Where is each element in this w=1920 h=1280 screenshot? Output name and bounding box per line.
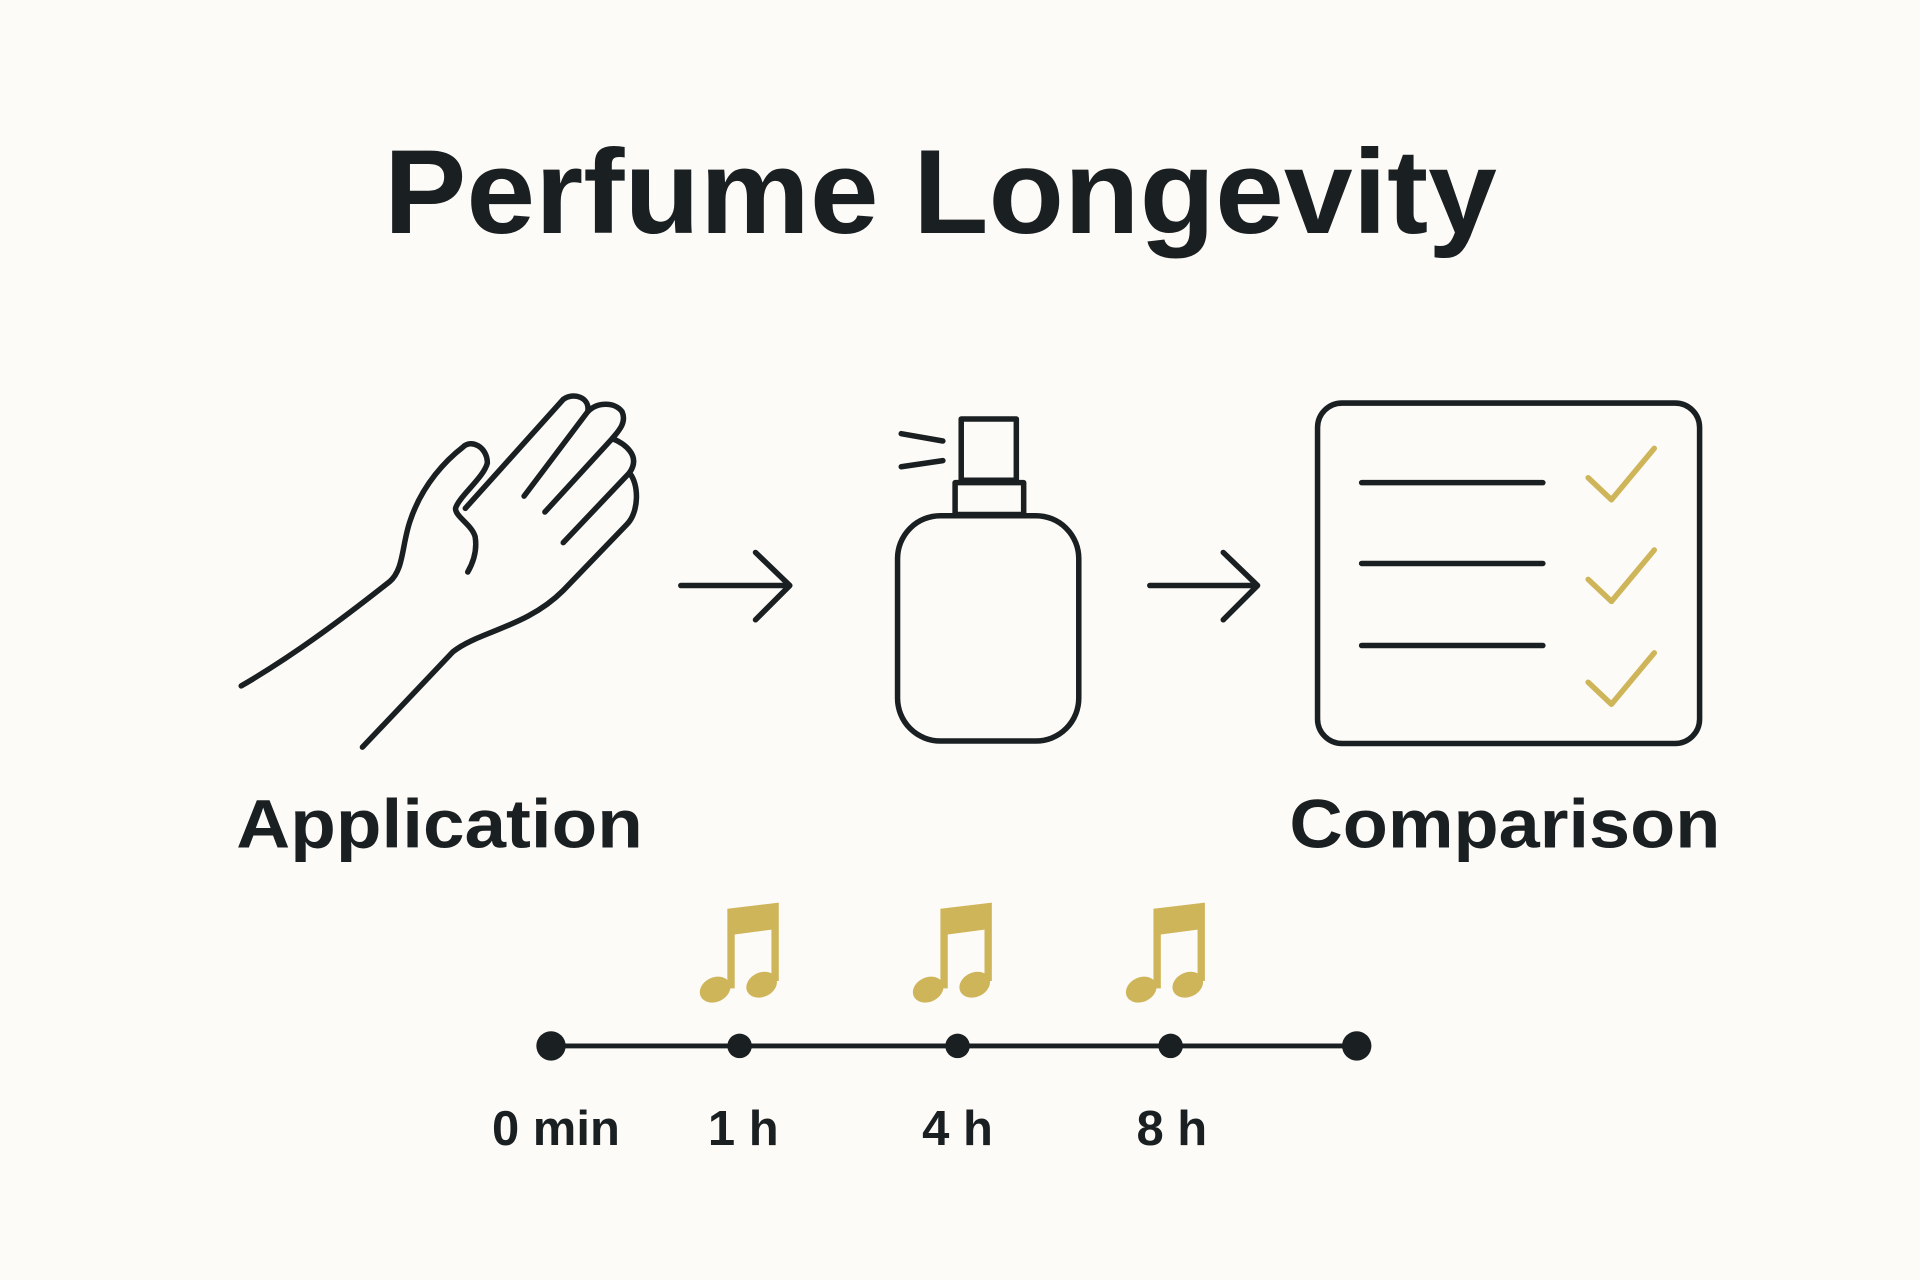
timeline labels: 1 h	[708, 1102, 779, 1156]
icon: hand	[241, 396, 636, 747]
timeline labels	[492, 1102, 1207, 1156]
arrow 1	[681, 552, 790, 620]
arrow 2	[1150, 552, 1258, 620]
timeline labels: 4 h	[922, 1102, 993, 1156]
icon: perfume bottle	[898, 419, 1079, 741]
timeline	[536, 1031, 1371, 1061]
label: Application: Application	[236, 786, 643, 863]
timeline labels: 0 min	[492, 1102, 620, 1156]
timeline labels: 8 h	[1136, 1102, 1207, 1156]
icons: music notes	[696, 903, 1207, 1007]
title: Perfume Longevity	[384, 125, 1497, 259]
icon: checklist	[1318, 403, 1700, 743]
label: Comparison: Comparison	[1289, 786, 1720, 863]
